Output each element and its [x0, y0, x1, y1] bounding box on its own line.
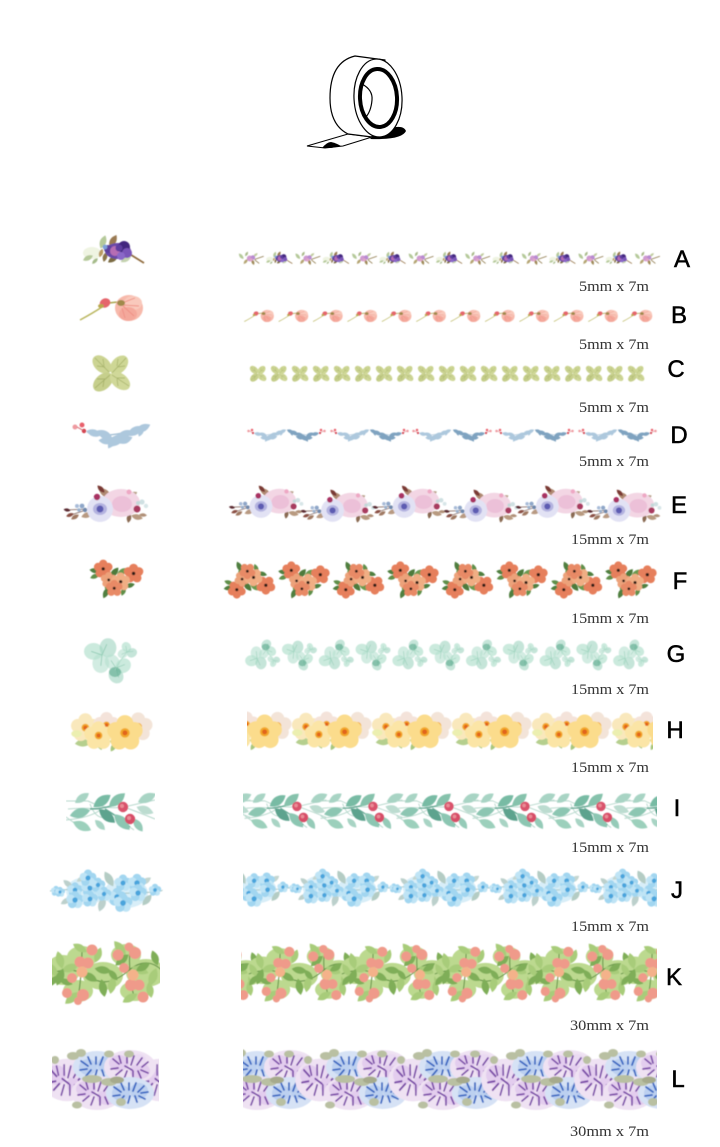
row B — [80, 295, 687, 353]
inner ring — [359, 68, 398, 128]
row F — [89, 560, 687, 627]
letter A: A — [674, 246, 690, 273]
sample G — [84, 638, 139, 686]
strip L — [243, 1048, 657, 1110]
sample C — [89, 352, 134, 395]
row K — [52, 940, 682, 1030]
strip J — [243, 868, 657, 908]
size L: 30mm x 7m — [570, 1124, 649, 1140]
strip B — [244, 310, 652, 322]
row L — [42, 1049, 717, 1140]
tape tail — [307, 134, 372, 148]
sample I — [66, 792, 155, 832]
size D: 5mm x 7m — [579, 454, 649, 470]
icon: tape roll — [307, 56, 406, 148]
row J — [50, 869, 689, 935]
size F: 15mm x 7m — [571, 611, 649, 627]
letter I: I — [674, 795, 680, 822]
strip D — [247, 428, 657, 443]
strip G — [245, 638, 649, 672]
size K: 30mm x 7m — [570, 1018, 649, 1034]
hole back arc — [362, 84, 372, 118]
sample A — [82, 233, 144, 265]
letter B: B — [671, 302, 687, 329]
sample B — [80, 295, 143, 321]
letter G: G — [667, 641, 685, 668]
tape shadow — [370, 127, 406, 139]
strip A — [238, 251, 660, 265]
row H — [71, 711, 692, 776]
letter E: E — [671, 492, 687, 519]
row A — [82, 233, 690, 295]
roll face — [352, 58, 404, 138]
sample E — [63, 484, 148, 523]
strip F — [223, 561, 657, 599]
strip K — [241, 943, 657, 1003]
sample K — [52, 940, 160, 1006]
row D — [72, 421, 688, 470]
size E: 15mm x 7m — [571, 532, 649, 548]
strip C — [248, 364, 646, 383]
size I: 15mm x 7m — [571, 840, 649, 856]
letter D: D — [670, 422, 688, 449]
row C — [89, 352, 685, 416]
row E — [63, 484, 687, 548]
size H: 15mm x 7m — [571, 760, 649, 776]
sample D — [72, 421, 152, 450]
sample J — [50, 869, 162, 913]
size J: 15mm x 7m — [571, 919, 649, 935]
size B: 5mm x 7m — [579, 337, 649, 353]
size C: 5mm x 7m — [579, 400, 649, 416]
size A: 5mm x 7m — [579, 279, 649, 295]
strip E — [229, 484, 661, 523]
strip I — [243, 792, 657, 830]
roll body — [330, 56, 385, 137]
letter J: J — [671, 877, 683, 904]
letter H: H — [666, 717, 684, 744]
row G — [84, 638, 685, 698]
letter L: L — [671, 1066, 685, 1093]
row I — [66, 792, 678, 852]
letter K: K — [666, 964, 682, 991]
letter C: C — [667, 356, 685, 383]
sample H — [71, 712, 152, 753]
letter F: F — [673, 568, 687, 595]
sample L — [52, 1048, 159, 1110]
size G: 15mm x 7m — [571, 682, 649, 698]
sample F — [89, 560, 143, 599]
strip H — [247, 711, 653, 750]
